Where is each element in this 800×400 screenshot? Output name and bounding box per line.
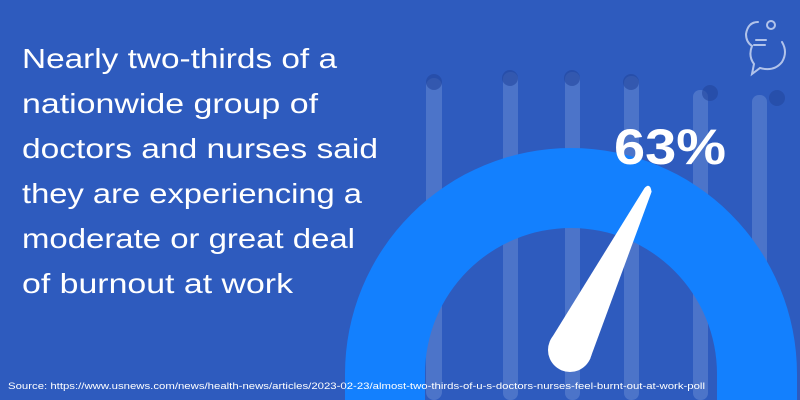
headline text block: they are experiencing a — [22, 178, 362, 209]
headline text block: nationwide group of — [22, 88, 318, 119]
icon: speech bubble with stethoscope — [746, 21, 785, 74]
headline text block: of burnout at work — [22, 268, 294, 299]
big stat: 63%: 63% — [614, 119, 726, 175]
gauge needle — [548, 186, 652, 372]
headline text block: Nearly two-thirds of a — [22, 43, 337, 74]
headline text block: doctors and nurses said — [22, 133, 378, 164]
headline text block: moderate or great deal — [22, 223, 355, 254]
source footnote: Source: https://www.usnews.com/news/health-news/articles/2023-02-23/almost-two-thirds-of-u-s-doctors-nurses-feel-burnt-out-at-work-poll — [8, 381, 705, 392]
background: faint matchsticks — [426, 72, 767, 400]
headline text block — [22, 43, 378, 299]
gauge arc — [345, 148, 797, 400]
